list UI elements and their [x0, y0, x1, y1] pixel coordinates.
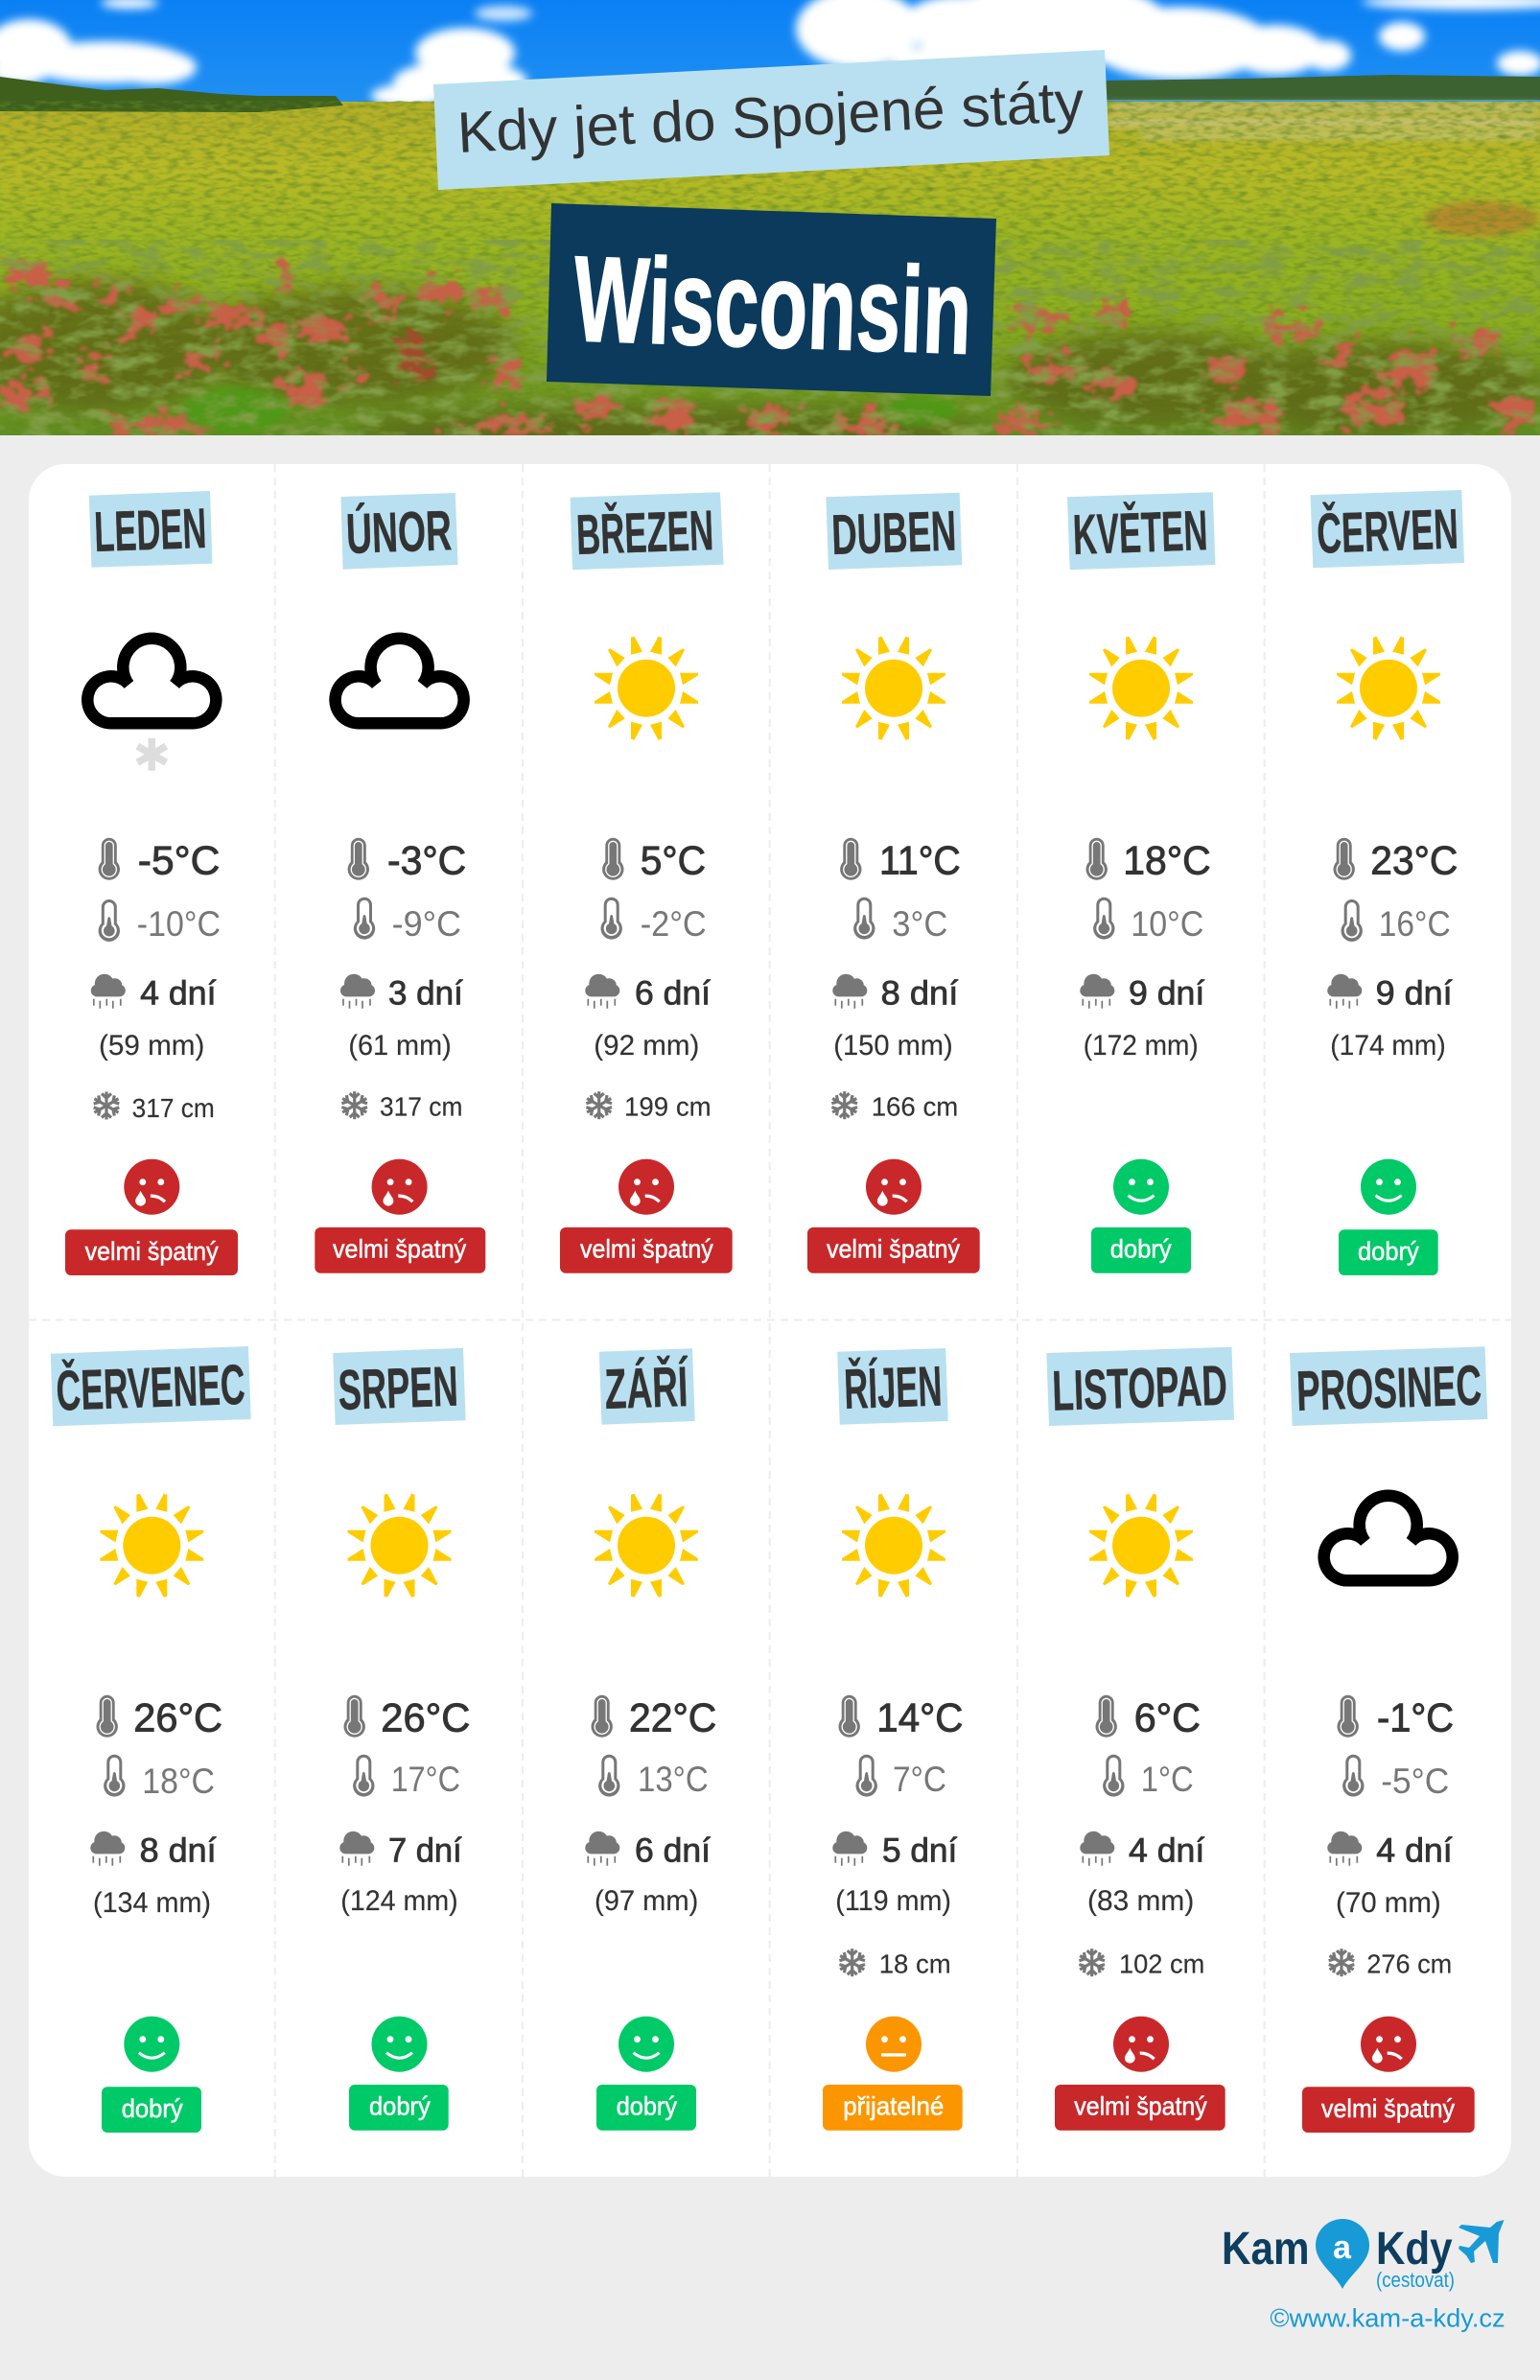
rainfall: (83 mm): [1087, 1885, 1194, 1917]
heading: Leden: LEDEN: [93, 497, 207, 564]
low temperature: [853, 898, 947, 944]
rain days: 8 dní: [881, 975, 959, 1013]
rating badge: [807, 1227, 980, 1273]
rain days: 8 dní: [140, 1832, 217, 1870]
rating face: good: [372, 2017, 428, 2072]
rating badge: [102, 2087, 201, 2133]
snowfall: [92, 1091, 215, 1123]
rating badge: velmi špatný: [827, 1235, 961, 1264]
heading: Únor: ÚNOR: [345, 499, 453, 566]
heading: Listopad: [1046, 1347, 1234, 1426]
rain days: 6 dní: [635, 975, 711, 1013]
snowfall: [585, 1091, 712, 1121]
low temperature: [1341, 899, 1451, 944]
low temperature: 13°C: [638, 1759, 709, 1799]
heading: Červenec: [51, 1346, 251, 1426]
low temperature: 17°C: [391, 1759, 460, 1799]
rainfall: (134 mm): [93, 1887, 211, 1919]
month: Říjen: [823, 1348, 963, 2131]
snowfall: 166 cm: [872, 1091, 958, 1121]
low temperature: 16°C: [1379, 903, 1451, 944]
heading: Červen: [1311, 490, 1464, 568]
month: Září: [585, 1348, 716, 2131]
low temperature: -10°C: [137, 903, 221, 944]
logo: Kam a Kdy (cestovat): Kdy: [1376, 2224, 1453, 2275]
high temperature: -5°C: [138, 838, 220, 883]
rain days: 9 dní: [1129, 975, 1205, 1013]
rainfall: (174 mm): [1330, 1030, 1446, 1062]
rating badge: velmi špatný: [1074, 2092, 1207, 2121]
snowfall: 102 cm: [1119, 1948, 1204, 1978]
heading: Květen: KVĚTEN: [1072, 498, 1208, 567]
low temperature: [99, 899, 221, 944]
rating badge: dobrý: [369, 2092, 431, 2121]
icon: cloud: [1324, 1496, 1453, 1580]
rating badge: velmi špatný: [333, 1235, 467, 1264]
low temperature: -5°C: [1381, 1761, 1449, 1801]
rain days: [1080, 974, 1205, 1013]
heading: Duben: DUBEN: [830, 499, 957, 567]
rating badge: přijatelné: [843, 2092, 944, 2121]
high temperature: 23°C: [1370, 838, 1458, 883]
rating face: good: [1113, 1159, 1169, 1215]
icon: sun: [842, 1494, 945, 1598]
snowfall: [1327, 1948, 1452, 1978]
rainfall: (61 mm): [348, 1030, 452, 1062]
icon: sun: [1089, 637, 1193, 740]
heading: Září: ZÁŘÍ: [604, 1354, 689, 1421]
month: Červenec: [51, 1346, 251, 2133]
title ribbon: Wisconsin: [547, 203, 996, 396]
high temperature: [1085, 838, 1211, 883]
heading: Únor: [341, 493, 458, 570]
high temperature: 6°C: [1134, 1695, 1201, 1740]
high temperature: [591, 1695, 716, 1740]
high temperature: 18°C: [1123, 838, 1211, 883]
heading: Září: [599, 1348, 695, 1425]
rain days: [1080, 1832, 1205, 1870]
rating face: very bad: [372, 1159, 428, 1215]
snowfall: 317 cm: [132, 1093, 215, 1123]
rainfall: (119 mm): [835, 1885, 951, 1917]
rating badge: [65, 1229, 238, 1275]
rain days: [832, 1832, 958, 1870]
low temperature: 10°C: [1131, 903, 1203, 944]
rain days: 3 dní: [388, 975, 463, 1013]
rain days: 4 dní: [140, 975, 217, 1013]
high temperature: 11°C: [879, 838, 961, 883]
rainfall: (124 mm): [340, 1885, 458, 1917]
rating badge: [315, 1227, 485, 1273]
rating badge: dobrý: [617, 2092, 678, 2121]
high temperature: 26°C: [133, 1695, 222, 1740]
low temperature: -9°C: [392, 903, 461, 944]
rating badge: [1302, 2087, 1475, 2133]
logo: Kam a Kdy (cestovat): (cestovat): [1376, 2268, 1455, 2292]
high temperature: [96, 1695, 222, 1740]
rainfall: (92 mm): [594, 1030, 699, 1062]
snowfall: [340, 1091, 462, 1121]
rainfall: (172 mm): [1084, 1030, 1199, 1062]
website url: ©www.kam-a-kdy.cz: [1270, 2304, 1505, 2333]
rating face: good: [124, 2017, 179, 2072]
rainfall: (150 mm): [833, 1030, 953, 1062]
heading: Říjen: [837, 1348, 948, 1425]
rain days: 7 dní: [388, 1832, 462, 1870]
icon: sun: [1337, 637, 1440, 740]
high temperature: [99, 838, 220, 883]
icon: sun: [347, 1494, 451, 1598]
heading: Srpen: SRPEN: [338, 1355, 459, 1422]
low temperature: [353, 1755, 460, 1799]
title ribbon: Wisconsin: Wisconsin: [572, 230, 974, 380]
snowfall: [830, 1091, 958, 1121]
month: Duben: [807, 493, 980, 1273]
rating badge: velmi špatný: [580, 1235, 713, 1264]
icon: map pin: [1316, 2219, 1369, 2289]
rainfall: (59 mm): [99, 1030, 204, 1062]
rating badge: [823, 2085, 963, 2131]
heading: Srpen: [333, 1348, 466, 1425]
heading: Březen: [571, 492, 724, 570]
icon: sun: [100, 1494, 203, 1598]
icon: airplane: [1458, 2220, 1504, 2263]
heading: Květen: [1067, 492, 1215, 570]
high temperature: [1333, 838, 1458, 883]
icon: cloud: [336, 639, 464, 723]
logo: Kam a Kdy (cestovat): [1222, 2219, 1504, 2292]
high temperature: [348, 838, 466, 883]
low temperature: [1093, 898, 1203, 944]
high temperature: 26°C: [381, 1695, 470, 1740]
rating badge: dobrý: [1110, 1235, 1172, 1264]
low temperature: 7°C: [893, 1759, 946, 1799]
icon: cloud with snow: [87, 639, 216, 771]
heading: Březen: BŘEZEN: [575, 498, 714, 567]
icon: map pin: a: [1333, 2229, 1352, 2266]
rainfall: (70 mm): [1336, 1887, 1441, 1919]
rating badge: [1339, 1229, 1438, 1275]
month: Prosinec: [1290, 1346, 1487, 2133]
rain days: 5 dní: [882, 1832, 958, 1870]
high temperature: -1°C: [1377, 1695, 1454, 1740]
high temperature: 14°C: [876, 1695, 963, 1740]
month: Červen: [1311, 490, 1464, 1275]
snowfall: 276 cm: [1366, 1948, 1452, 1978]
icon: sun: [1089, 1494, 1193, 1598]
heading: Říjen: ŘÍJEN: [843, 1353, 943, 1421]
month: Listopad: [1046, 1347, 1234, 2131]
heading: Leden: [89, 491, 212, 568]
high temperature: -3°C: [387, 838, 466, 883]
icon: sun: [595, 1494, 698, 1598]
snowfall: [1078, 1948, 1204, 1978]
rating badge: [596, 2085, 696, 2131]
rating face: very bad: [618, 1159, 674, 1215]
panel: monthly weather table: [29, 464, 1511, 2177]
rain days: 4 dní: [1129, 1832, 1205, 1870]
month: Srpen: [333, 1348, 470, 2131]
rating badge: velmi špatný: [1321, 2094, 1456, 2123]
rain days: 4 dní: [1376, 1832, 1453, 1870]
rating badge: [1055, 2085, 1225, 2131]
high temperature: [602, 838, 706, 883]
low temperature: [855, 1755, 946, 1799]
low temperature: [598, 1755, 709, 1799]
high temperature: [1337, 1695, 1454, 1740]
rating badge: dobrý: [1358, 1237, 1419, 1266]
low temperature: [104, 1755, 215, 1801]
snowfall: 317 cm: [380, 1091, 462, 1121]
snowfall: 199 cm: [624, 1091, 712, 1121]
rain days: [1327, 1832, 1453, 1870]
high temperature: [1095, 1695, 1201, 1740]
rating face: very bad: [1361, 2017, 1416, 2072]
rating badge: velmi špatný: [85, 1237, 219, 1266]
rain days: 6 dní: [635, 1832, 711, 1870]
logo: Kam a Kdy (cestovat): Kam: [1222, 2224, 1310, 2275]
month: Leden: [65, 491, 238, 1275]
rating face: very bad: [1113, 2017, 1169, 2072]
icon: sun: [595, 637, 698, 740]
rain days: 9 dní: [1376, 975, 1453, 1013]
rating face: acceptable: [866, 2017, 922, 2072]
heading: Duben: [826, 493, 962, 570]
low temperature: 3°C: [892, 903, 947, 944]
rain days: [585, 974, 711, 1013]
month: Květen: [1067, 492, 1215, 1273]
rain days: [91, 974, 217, 1013]
rating badge: [1091, 1227, 1191, 1273]
rating face: good: [1361, 1159, 1416, 1215]
rating badge: [560, 1227, 733, 1273]
rating face: very bad: [124, 1159, 179, 1215]
rating badge: [349, 2085, 449, 2131]
high temperature: [838, 1695, 963, 1740]
rain days: [340, 974, 463, 1013]
low temperature: [1103, 1755, 1194, 1799]
rain days: [832, 974, 959, 1013]
low temperature: [600, 898, 707, 944]
snowfall: [838, 1948, 951, 1978]
rain days: [339, 1832, 462, 1870]
high temperature: 22°C: [629, 1695, 716, 1740]
title ribbon: Kdy jet do Spojené státy: [433, 50, 1109, 190]
high temperature: [840, 838, 961, 883]
low temperature: [1342, 1755, 1449, 1801]
rating badge: dobrý: [122, 2094, 183, 2123]
month: Únor: [315, 493, 485, 1273]
icon: sun: [842, 637, 945, 740]
low temperature: 1°C: [1141, 1759, 1194, 1799]
rating face: good: [618, 2017, 674, 2072]
low temperature: [354, 898, 461, 944]
month: Březen: [560, 492, 733, 1273]
rain days: [585, 1832, 711, 1870]
rain days: [90, 1832, 217, 1870]
title ribbon: Kdy jet do Spojené státy: Kdy jet do Spojené státy: [455, 69, 1085, 165]
heading: Červenec: ČERVENEC: [55, 1352, 246, 1423]
high temperature: 5°C: [641, 838, 706, 883]
rain days: [1327, 974, 1453, 1013]
rainfall: (97 mm): [595, 1885, 698, 1917]
rating face: very bad: [866, 1159, 922, 1215]
snowfall: 18 cm: [879, 1948, 951, 1978]
low temperature: 18°C: [142, 1761, 215, 1801]
hero photo: Wisconsin meadow under a blue sky: [0, 0, 1540, 435]
heading: Listopad: LISTOPAD: [1051, 1354, 1228, 1423]
low temperature: -2°C: [641, 903, 707, 944]
